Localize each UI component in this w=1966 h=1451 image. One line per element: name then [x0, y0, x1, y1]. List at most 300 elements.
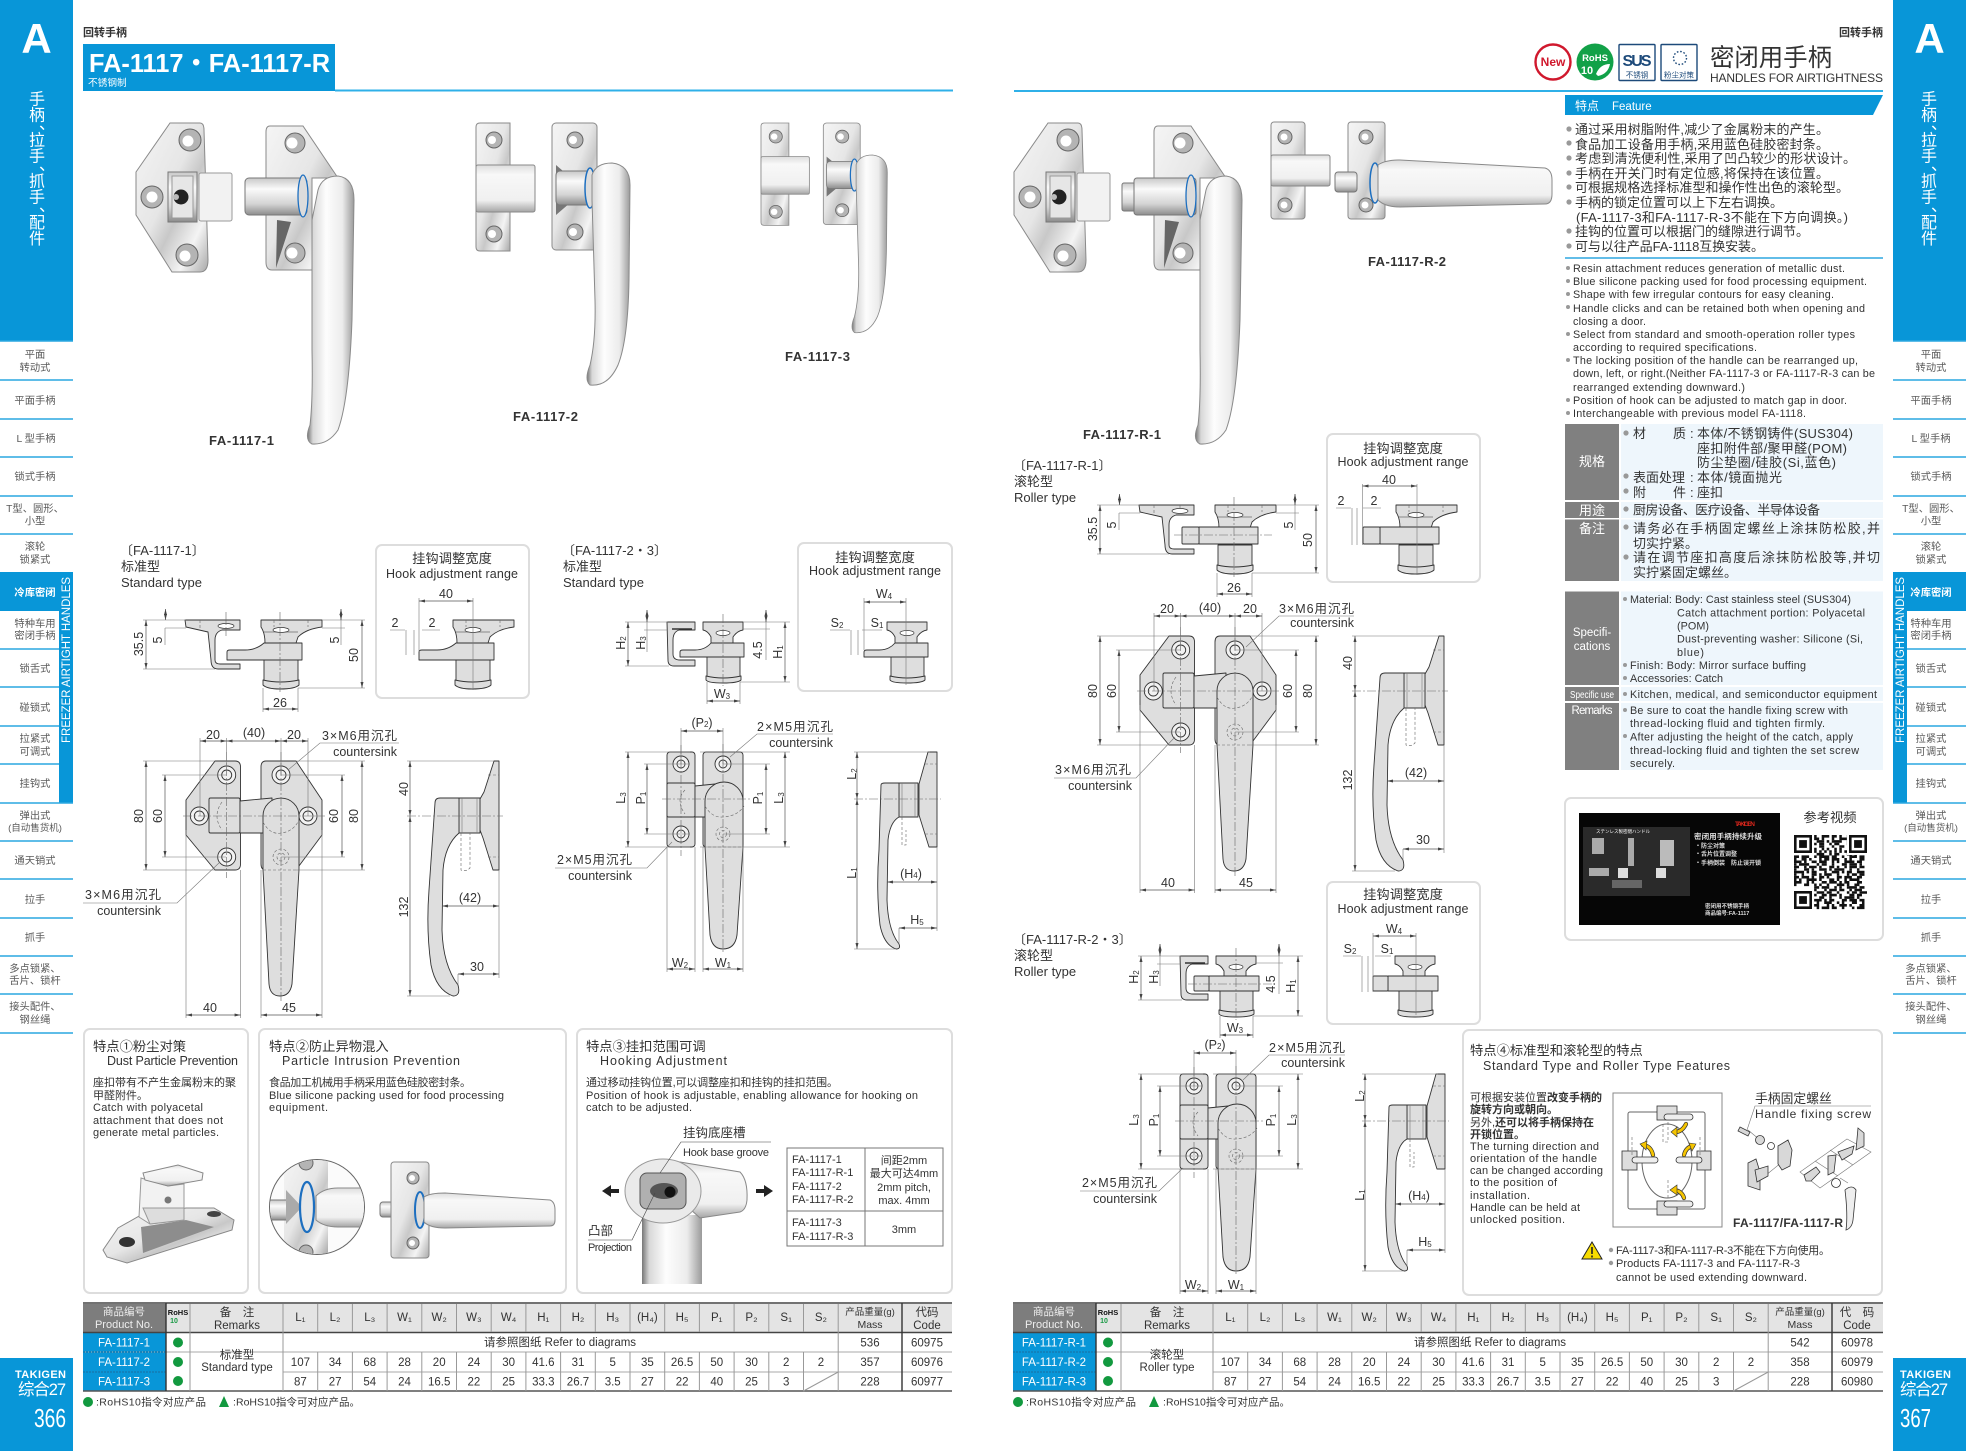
feature list Chinese: 考虑到清洗便利性,采用了凹凸较少的形状设计。	[1575, 151, 1856, 166]
technical drawing FA-1117-1: 60	[327, 809, 341, 823]
badge: SUS stainless: 不锈钢	[1626, 70, 1648, 80]
specification table left: P₂	[745, 1312, 758, 1324]
right navigation list: 可调式	[1916, 745, 1946, 758]
feature panel 1: dust particle prevention: generate metal particles.	[93, 1127, 219, 1139]
technical drawing FA-1117-2/3: P	[634, 796, 648, 804]
specifications table English: Accessories: Catch	[1630, 673, 1723, 685]
specification table right: 25	[1675, 1376, 1688, 1388]
specification table right: 22	[1398, 1376, 1410, 1388]
hook adjustment panel FA-1117-R-2/3: Hook adjustment range	[1338, 902, 1469, 916]
specifications table English: blue)	[1677, 647, 1704, 659]
specification table left: 5	[609, 1357, 616, 1369]
technical drawing FA-1117-1: countersink	[333, 745, 398, 759]
feature panel 4: standard and roller type features: can be changed according	[1470, 1165, 1603, 1177]
right navigation list: 密闭手柄	[1910, 629, 1952, 642]
right navigation list: T型、圆形、	[1902, 502, 1960, 515]
specification table right: 87	[1224, 1376, 1237, 1388]
technical drawing FA-1117-R-2/3: countersink	[1281, 1056, 1346, 1070]
hook adjustment panel FA-1117-1: 2	[429, 616, 436, 630]
hook adjustment panel FA-1117-1: 40	[439, 587, 453, 601]
specification table right: 60978	[1841, 1338, 1873, 1350]
left header: product title bar	[83, 44, 953, 91]
technical drawing FA-1117-R-2/3: P	[1147, 1118, 1161, 1126]
left navigation list: 特种车用	[14, 617, 56, 630]
specifications table English: Specifi-	[1573, 627, 1611, 639]
technical drawing FA-1117-2/3: 3	[726, 692, 731, 701]
right header rule	[1014, 90, 1883, 92]
technical drawing FA-1117-R-2/3: (H4)	[1408, 1189, 1430, 1203]
diagram: exploded view	[1733, 1091, 1871, 1230]
specifications table Chinese: :	[1690, 485, 1694, 500]
specifications table Chinese: 厨房设备、医疗设备、半导体设备	[1633, 502, 1820, 518]
feature list Chinese: 通过采用树脂附件,减少了金属粉末的产生。	[1575, 122, 1829, 137]
technical drawing FA-1117-R-2/3: H	[1147, 975, 1161, 984]
specification table left: 20	[433, 1357, 446, 1369]
hook adjustment panel FA-1117-R-2/3: 2	[1352, 947, 1357, 956]
right header: series title	[1710, 45, 1883, 85]
technical drawing FA-1117-1: 132	[397, 897, 411, 917]
technical drawing FA-1117-2/3	[555, 610, 941, 972]
hook adjustment values table: 2mm pitch,	[877, 1182, 931, 1194]
specification table right: 54	[1293, 1376, 1307, 1388]
specification table left: 10	[170, 1318, 178, 1325]
specification table left: 3.5	[605, 1376, 621, 1388]
feature panel 4: standard and roller type features: Standard Type and Roller Type Features	[1483, 1059, 1730, 1073]
left page number block	[0, 1358, 73, 1451]
left navigation list: 可调式	[20, 745, 50, 758]
specification table left: L₂	[330, 1312, 341, 1324]
technical drawing FA-1117-2/3: H	[910, 913, 919, 927]
feature list Chinese: (FA-1117-3和FA-1117-R-3不能在下方向调换。)	[1576, 210, 1848, 225]
specification table left: 22	[468, 1376, 480, 1388]
hook adjustment values table: FA-1117-R-2	[792, 1194, 853, 1206]
specification table right: Remarks	[1144, 1320, 1190, 1332]
reference video panel	[1565, 798, 1883, 940]
hook adjustment panel FA-1117-R-2/3: 挂钩调整宽度	[1363, 886, 1443, 902]
hook adjustment panel FA-1117-R-1: 挂钩调整宽度	[1363, 440, 1443, 456]
technical drawing FA-1117-2/3: 2	[619, 636, 628, 641]
technical drawing FA-1117-R-1: 3×M6用沉孔	[1055, 763, 1131, 777]
RoHS legend left: :RoHS10指令可对应产品。	[233, 1396, 360, 1408]
drawing title FA-1117-R-2/3: 滚轮型	[1014, 948, 1053, 963]
specification table right: 26.5	[1601, 1357, 1623, 1369]
feature panel 1: dust particle prevention: Catch with polyacetal	[93, 1102, 203, 1114]
right header: category label: 回转手柄	[1839, 25, 1883, 39]
hook adjustment panel FA-1117-1	[376, 545, 529, 698]
feature panel 4: standard and roller type features: unlocked position.	[1470, 1214, 1565, 1226]
specification table left: L₁	[295, 1312, 306, 1324]
left navigation list: 挂钩式	[20, 777, 50, 790]
specification table left: 26.7	[567, 1376, 589, 1388]
feature panel 4: standard and roller type features: installation.	[1470, 1190, 1530, 1202]
specification table left: 2	[783, 1357, 789, 1369]
specification table left: 33.3	[532, 1376, 554, 1388]
specification table right: 备 注	[1150, 1305, 1185, 1319]
specification table left: H₃	[606, 1312, 620, 1324]
right navigation list: FREEZER AIRTIGHT HANDLES	[1895, 577, 1907, 743]
feature list English: Handle clicks and can be retained both when opening and	[1573, 303, 1865, 315]
feature panel 1: dust particle prevention: attachment that does not	[93, 1115, 223, 1127]
video thumbnail: ・防尘对策	[1695, 842, 1725, 850]
technical drawing FA-1117-R-2/3: W	[1228, 1278, 1240, 1292]
technical drawing FA-1117-1: 3×M6用沉孔	[322, 729, 397, 743]
feature panel 3: hooking adjustment: catch to be adjusted.	[586, 1102, 692, 1114]
specification table left: 27	[329, 1376, 341, 1388]
warning note: cannot be used extending downward.	[1616, 1272, 1807, 1284]
specification table left: 50	[710, 1357, 723, 1369]
left navigation list: L 型手柄	[16, 432, 56, 445]
specification table left: 30	[745, 1357, 758, 1369]
specification table left: 107	[291, 1357, 310, 1369]
right navigation list: 锁式手柄	[1910, 470, 1952, 483]
hook adjustment panel FA-1117-R-1: 2	[1338, 494, 1345, 508]
arrows: adjustment direction	[602, 1185, 773, 1197]
technical drawing FA-1117-R-2/3: W	[1185, 1278, 1197, 1292]
technical drawing FA-1117-2/3: (P2)	[691, 716, 713, 730]
technical drawing FA-1117-R-2/3: 1	[1269, 1113, 1278, 1118]
right navigation list	[1893, 341, 1966, 1033]
hook adjustment panel FA-1117-R-1: 2	[1371, 494, 1378, 508]
specifications table Chinese: 切实拧紧。	[1633, 536, 1698, 551]
feature banner: 特点	[1575, 98, 1599, 113]
technical drawing FA-1117-2/3: W	[672, 956, 684, 970]
specification table left: 22	[676, 1376, 688, 1388]
specifications table Chinese: 防尘垫圈/硅胶(Si,蓝色)	[1697, 455, 1836, 470]
specification table right: 3.5	[1535, 1376, 1551, 1388]
feature panel 1: dust particle prevention	[84, 1029, 248, 1293]
specifications table Chinese: 件	[1673, 485, 1686, 500]
specification table right: S₂	[1745, 1312, 1757, 1324]
technical drawing FA-1117-2/3: 3	[639, 636, 648, 641]
specification table right: (H₄)	[1567, 1312, 1588, 1324]
technical drawing FA-1117-2/3: L	[614, 797, 628, 804]
left navigation list: 通天销式	[14, 854, 56, 867]
feature panel 4: standard and roller type features: Handle can be held at	[1470, 1202, 1580, 1214]
technical drawing FA-1117-1: countersink	[97, 904, 162, 918]
video thumbnail: ・舌片位置调整	[1695, 850, 1737, 858]
badge: RoHS 10: RoHS	[1582, 53, 1608, 64]
feature panel 3: hooking adjustment: 特点③挂扣范围可调	[586, 1039, 706, 1054]
specification table left: RoHS	[168, 1308, 188, 1317]
specification table right: W₃	[1396, 1312, 1412, 1324]
RoHS legend right: :RoHS10指令可对应产品。	[1163, 1396, 1290, 1408]
RoHS legend right: :RoHS10指令对应产品	[1026, 1396, 1136, 1408]
feature list English: The locking position of the handle can be rearranged up,	[1573, 355, 1858, 367]
technical drawing FA-1117-R-1	[1054, 494, 1448, 893]
drawing title FA-1117-1	[120, 543, 205, 590]
specifications table Chinese	[1565, 424, 1883, 581]
specification table left: H₅	[676, 1312, 689, 1324]
specifications table Chinese: 座扣	[1697, 485, 1723, 500]
specifications table Chinese: 规格	[1579, 454, 1605, 469]
specification table right: L₃	[1294, 1312, 1306, 1324]
specification table left: Mass	[857, 1319, 883, 1331]
specification table right: H₂	[1502, 1312, 1514, 1324]
right navigation list: 冷库密闭	[1910, 586, 1952, 599]
technical drawing FA-1117-1: 40	[203, 1001, 217, 1015]
technical drawing FA-1117-R-2/3: 3	[1132, 1114, 1141, 1119]
technical drawing FA-1117-R-2/3: 1	[1152, 1113, 1161, 1118]
technical drawing FA-1117-2/3: 4.5	[751, 641, 765, 659]
feature list English: Shape with few irregular contours for easy cleaning.	[1573, 289, 1834, 301]
feature panel 3: hooking adjustment: 通过移动挂钩位置,可以调整座扣和挂钩的挂扣范围。	[586, 1075, 838, 1089]
right page number block: 综合27	[1900, 1380, 1948, 1399]
product photo FA-1117-3	[761, 123, 887, 364]
right navigation list: 拉手	[1921, 893, 1941, 906]
feature list Chinese: 手柄在开关门时有定位感,将保持在该位置。	[1575, 166, 1829, 181]
technical drawing FA-1117-1: 60	[151, 809, 165, 823]
left page number block: 综合27	[18, 1380, 66, 1399]
hook adjustment values table: FA-1117-R-3	[792, 1231, 853, 1243]
specification table left: W₄	[501, 1312, 517, 1324]
right page number block: TAKIGEN	[1900, 1369, 1951, 1381]
feature banner: Feature	[1612, 101, 1652, 113]
hook adjustment panel FA-1117-2/3: 4	[888, 592, 893, 601]
feature list Chinese: 手柄的锁定位置可以上下左右调换。	[1575, 195, 1783, 210]
left navigation list: (自动售货机)	[8, 822, 62, 834]
specification table right: W₁	[1327, 1312, 1342, 1324]
feature list Chinese: 可与以往产品FA-1118互换安装。	[1575, 239, 1764, 254]
technical drawing FA-1117-2/3: 2	[850, 768, 859, 773]
left navigation list	[0, 341, 73, 1033]
specification table left: 2	[818, 1357, 824, 1369]
hook adjustment panel FA-1117-R-2/3: 4	[1398, 927, 1403, 936]
technical drawing FA-1117-1: 26	[273, 696, 287, 710]
specifications table Chinese: 本体/镜面抛光	[1697, 470, 1782, 485]
technical drawing FA-1117-R-2/3: 1	[1289, 979, 1298, 984]
left navigation list: 平面	[25, 350, 45, 361]
feature panel 3: hooking adjustment: Hooking Adjustment	[600, 1054, 728, 1068]
technical drawing FA-1117-2/3: 1	[639, 791, 648, 796]
technical drawing FA-1117-2/3: P	[751, 796, 765, 804]
product photo FA-1117-2	[476, 123, 630, 424]
technical drawing FA-1117-R-1: 35.5	[1086, 517, 1100, 541]
sidebar letter A: A	[21, 15, 52, 62]
specification table left: 54	[363, 1376, 377, 1388]
specification table left: Standard type	[201, 1362, 273, 1374]
feature list English: Resin attachment reduces generation of metallic dust.	[1573, 263, 1845, 275]
specification table right	[1013, 1303, 1883, 1391]
technical drawing FA-1117-1: (40)	[243, 726, 265, 740]
video thumbnail: 商品编号:FA-1117	[1705, 909, 1749, 917]
feature panel 3: hooking adjustment	[577, 1029, 952, 1293]
specification table left: 请参照图纸 Refer to diagrams	[484, 1335, 636, 1349]
specification table right: W₂	[1362, 1312, 1377, 1324]
right navigation list: 弹出式	[1916, 809, 1946, 822]
specification table right: Code	[1843, 1320, 1871, 1332]
right navigation list: 特种车用	[1910, 617, 1952, 630]
technical drawing FA-1117-R-2/3: 3	[1152, 970, 1161, 975]
specification table right: 28	[1328, 1357, 1341, 1369]
left navigation list: 碰锁式	[20, 701, 50, 714]
specification table right: FA-1117-R-3	[1022, 1376, 1086, 1388]
technical drawing FA-1117-R-1: 45	[1239, 876, 1253, 890]
hook adjustment panel FA-1117-1: Hook adjustment range	[386, 567, 518, 581]
specification table right: 30	[1432, 1357, 1445, 1369]
technical drawing FA-1117-1: 50	[347, 648, 361, 662]
photo: hook base	[625, 1159, 747, 1284]
specification table right: 30	[1675, 1357, 1688, 1369]
specifications table English: securely.	[1630, 758, 1675, 770]
specification table right: 31	[1502, 1357, 1514, 1369]
specifications table Chinese: 用途	[1579, 503, 1605, 518]
product photo FA-1117-R-2	[1271, 122, 1552, 269]
feature list Chinese: 挂钩的位置可以根据门的缝隙进行调节。	[1575, 224, 1809, 239]
left header: product title bar: 不锈钢制	[88, 76, 127, 89]
drawing title FA-1117-2/3	[562, 543, 667, 590]
specification table left: 68	[363, 1357, 376, 1369]
left navigation list: 小型	[25, 514, 45, 528]
technical drawing FA-1117-1: 45	[282, 1001, 296, 1015]
technical drawing FA-1117-1: 30	[470, 960, 484, 974]
feature list English: down, left, or right.(Neither FA-1117-3 or FA-1117-R-3 can be	[1573, 368, 1875, 380]
right navigation list: 接头配件、	[1905, 1000, 1957, 1013]
badge: New: New	[1541, 55, 1566, 69]
feature panel 3: hooking adjustment: Projection	[588, 1242, 632, 1254]
right navigation list: 挂钩式	[1916, 777, 1946, 790]
specification table right: 35	[1571, 1357, 1584, 1369]
warning note	[1609, 1243, 1830, 1284]
specifications table Chinese: 实拧紧固定螺丝。	[1633, 565, 1737, 580]
specification table right: 产品重量(g)	[1775, 1306, 1825, 1318]
technical drawing FA-1117-R-2/3: 1	[1358, 1189, 1367, 1194]
diagram: handle orientation	[1613, 1093, 1722, 1227]
left page number block: 366	[34, 1403, 66, 1433]
technical drawing FA-1117-R-2/3: 3	[1239, 1026, 1244, 1035]
feature panel 4: standard and roller type features: to the position of	[1470, 1177, 1558, 1189]
technical drawing FA-1117-2/3: L	[845, 773, 859, 780]
specification table right: W₄	[1431, 1312, 1447, 1324]
specification table left: 60977	[911, 1376, 943, 1388]
feature panel 3: hooking adjustment: 挂钩底座槽	[683, 1125, 746, 1140]
specification table left: W₂	[432, 1312, 447, 1324]
left header: product title bar: FA-1117・FA-1117-R	[89, 48, 330, 78]
specifications table English: Material: Body: Cast stainless steel (SUS304)	[1630, 594, 1851, 606]
specification table right: 34	[1259, 1357, 1272, 1369]
specification table right: 41.6	[1462, 1357, 1484, 1369]
technical drawing FA-1117-R-2/3: L	[1353, 1095, 1367, 1102]
specification table left: FA-1117-3	[98, 1376, 150, 1388]
drawing title FA-1117-2/3: Standard type	[563, 575, 644, 590]
hook adjustment panel FA-1117-2/3: 1	[879, 621, 884, 630]
specifications table English	[1565, 592, 1883, 770]
feature panel 1: dust particle prevention: 特点①粉尘对策	[93, 1038, 186, 1054]
specification table left: 24	[398, 1376, 411, 1388]
specification table left: 代码	[916, 1306, 938, 1319]
specification table left: 25	[745, 1376, 758, 1388]
specifications table English: Catch attachment portion: Polyacetal	[1677, 608, 1865, 620]
technical drawing FA-1117-R-1: 5	[1282, 521, 1296, 528]
specifications table English: Dust-preventing washer: Silicone (Si,	[1677, 634, 1863, 646]
right navigation list: 平面	[1921, 350, 1941, 361]
technical drawing FA-1117-R-2/3: 3	[1290, 1114, 1299, 1119]
specification table right: 20	[1363, 1357, 1376, 1369]
specifications table Chinese: 请务必在手柄固定螺丝上涂抹防松胶,并	[1633, 521, 1880, 536]
right navigation list: L 型手柄	[1911, 432, 1951, 445]
specification table left: 60976	[911, 1357, 943, 1369]
specification table right: Roller type	[1140, 1362, 1194, 1374]
specification table left: 60975	[911, 1338, 943, 1350]
hook adjustment values table: max. 4mm	[878, 1195, 930, 1207]
right navigation list: 滚轮	[1921, 540, 1941, 553]
feature panel 4: standard and roller type features: The turning direction and	[1470, 1141, 1599, 1153]
photo: handle with blue seal	[380, 1162, 555, 1258]
specification table left: Product No.	[95, 1319, 153, 1331]
technical drawing FA-1117-R-1: countersink	[1290, 616, 1355, 630]
specification table right: L₂	[1260, 1312, 1271, 1324]
feature panel 2: particle intrusion prevention: equipment.	[269, 1102, 328, 1114]
feature panel 1: dust particle prevention: 甲醛附件。	[93, 1088, 148, 1102]
specification table right: 10	[1100, 1318, 1108, 1325]
specification table right: 25	[1432, 1376, 1445, 1388]
specification table left: Remarks	[214, 1320, 260, 1332]
technical drawing FA-1117-R-2/3: 2	[1358, 1090, 1367, 1095]
drawing title FA-1117-R-2/3: 〔FA-1117-R-2・3〕	[1013, 932, 1132, 947]
specification table right: 27	[1571, 1376, 1584, 1388]
drawing title FA-1117-1: Standard type	[121, 575, 202, 590]
right navigation list: 碰锁式	[1916, 701, 1946, 714]
specification table left: 357	[860, 1357, 880, 1369]
hook adjustment values table: FA-1117-1	[792, 1154, 842, 1166]
specification table right: H₁	[1467, 1312, 1480, 1324]
specification table right: 50	[1640, 1357, 1653, 1369]
feature list Chinese	[1566, 122, 1856, 254]
drawing title FA-1117-1: 标准型	[121, 559, 160, 574]
specification table left: W₃	[466, 1312, 482, 1324]
left navigation list: 拉紧式	[20, 732, 50, 745]
specification table right: 40	[1640, 1376, 1653, 1388]
right navigation list: 平面手柄	[1910, 394, 1952, 407]
specification table left: FA-1117-1	[98, 1338, 150, 1350]
specification table right: H₃	[1536, 1312, 1550, 1324]
right navigation list: 钢丝绳	[1916, 1013, 1946, 1026]
technical drawing FA-1117-2/3: W	[715, 956, 727, 970]
feature list English: Blue silicone packing used for food processing equipment.	[1573, 276, 1867, 288]
specification table right: 16.5	[1358, 1376, 1380, 1388]
specification table right: 60980	[1841, 1376, 1873, 1388]
right navigation list: 舌片、锁杆	[1905, 974, 1957, 987]
right page number block: 367	[1900, 1403, 1931, 1433]
left header: category label: 回转手柄	[83, 25, 127, 39]
hook adjustment panel FA-1117-R-2/3: S	[1381, 942, 1389, 956]
technical drawing FA-1117-R-2/3: L	[1127, 1119, 1141, 1126]
specification table left: 536	[860, 1338, 880, 1350]
technical drawing FA-1117-R-2/3: W	[1227, 1021, 1239, 1035]
technical drawing FA-1117-R-1: 20	[1243, 602, 1257, 616]
technical drawing FA-1117-1: 20	[206, 728, 220, 742]
hook adjustment panel FA-1117-R-2/3: 1	[1389, 947, 1394, 956]
badge: SUS stainless	[1619, 44, 1655, 80]
technical drawing FA-1117-2/3: 3	[619, 792, 628, 797]
technical drawing FA-1117-1: (42)	[459, 891, 481, 905]
specification table right: L₁	[1225, 1312, 1236, 1324]
badge: dust countermeasure	[1661, 44, 1697, 80]
feature list Chinese: 可根据规格选择标准型和操作性出色的滚轮型。	[1575, 180, 1849, 195]
specification table right: RoHS	[1098, 1308, 1118, 1317]
specification table right: 26.7	[1497, 1376, 1519, 1388]
specification table left: 228	[860, 1376, 880, 1388]
technical drawing FA-1117-R-1: 80	[1086, 684, 1100, 698]
hook adjustment values table: 间距2mm	[881, 1154, 927, 1167]
specification table right: 107	[1221, 1357, 1240, 1369]
left navigation list: 平面手柄	[14, 394, 56, 407]
specification table right: 滚轮型	[1150, 1348, 1184, 1362]
right sidebar letter A: A	[1914, 15, 1945, 62]
technical drawing FA-1117-R-2/3: 2	[1132, 970, 1141, 975]
specifications table Chinese: :	[1690, 426, 1694, 441]
technical drawing FA-1117-R-2/3: H	[1418, 1235, 1427, 1249]
hook adjustment panel FA-1117-2/3: 挂钩调整宽度	[835, 549, 915, 565]
